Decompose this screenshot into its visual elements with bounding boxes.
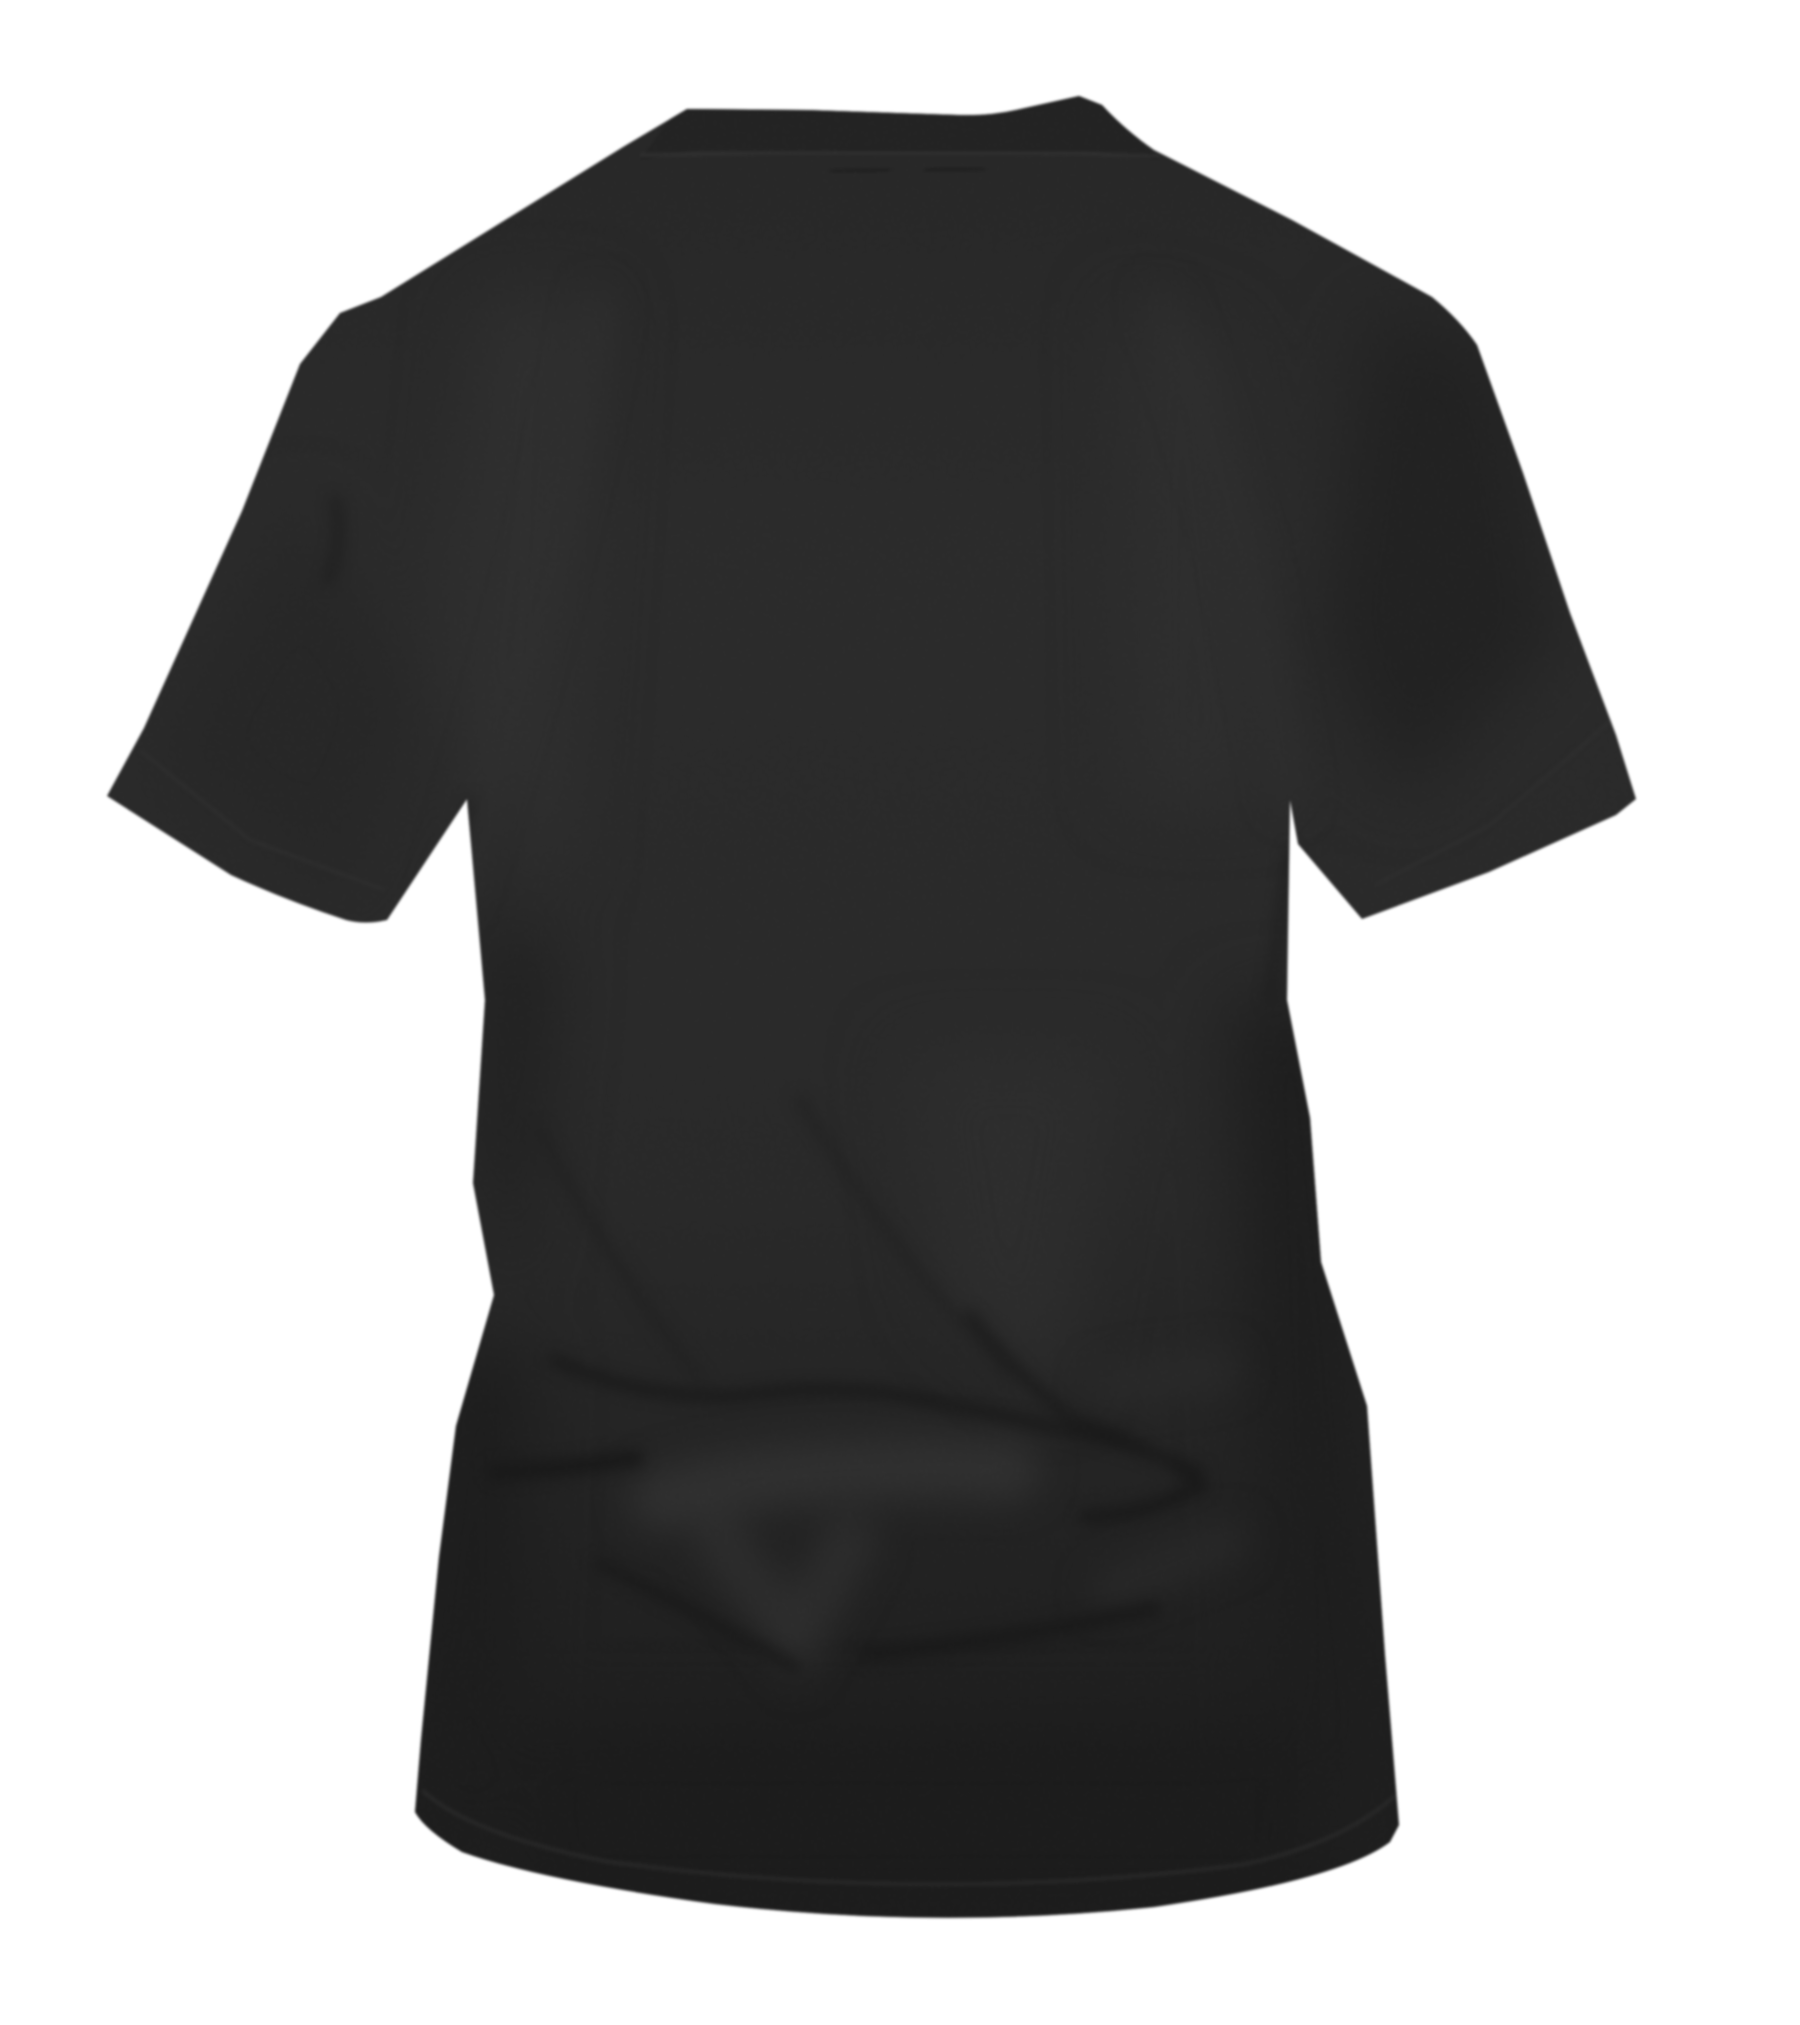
sleeve hems [140,720,1612,890]
shirt body [90,90,1650,1930]
fabric creases [561,1316,1198,1662]
broad shading [452,397,1513,1460]
bottom hem [500,1833,1297,1885]
neck collar [672,96,1132,134]
fabric highlights [644,1446,1024,1654]
t-shirt illustration [106,94,1638,1920]
fabric texture [90,90,1650,1930]
